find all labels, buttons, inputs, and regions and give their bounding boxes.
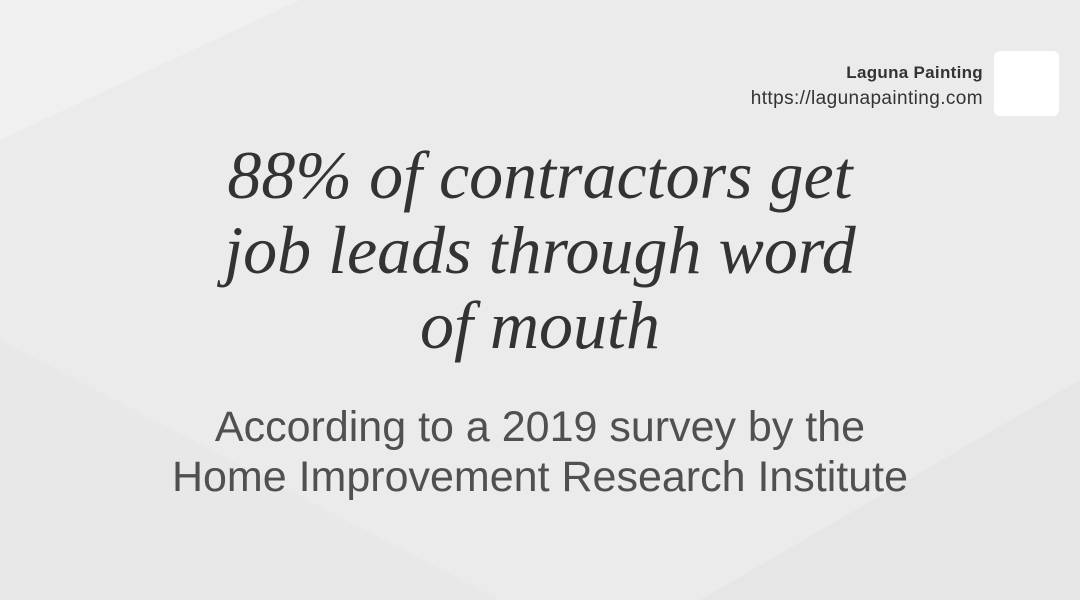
brand text: Laguna Painting	[846, 63, 983, 82]
title	[217, 137, 856, 363]
title: job leads through word	[224, 212, 856, 288]
title: 88% of contractors get	[227, 137, 853, 213]
brand text	[751, 63, 983, 109]
subtitle	[172, 403, 908, 501]
title: of mouth	[420, 287, 660, 363]
subtitle: Home Improvement Research Institute	[172, 453, 908, 501]
subtitle: According to a 2019 survey by the	[215, 403, 865, 451]
brand text: https://lagunapainting.com	[751, 88, 983, 109]
logo box	[994, 51, 1059, 116]
